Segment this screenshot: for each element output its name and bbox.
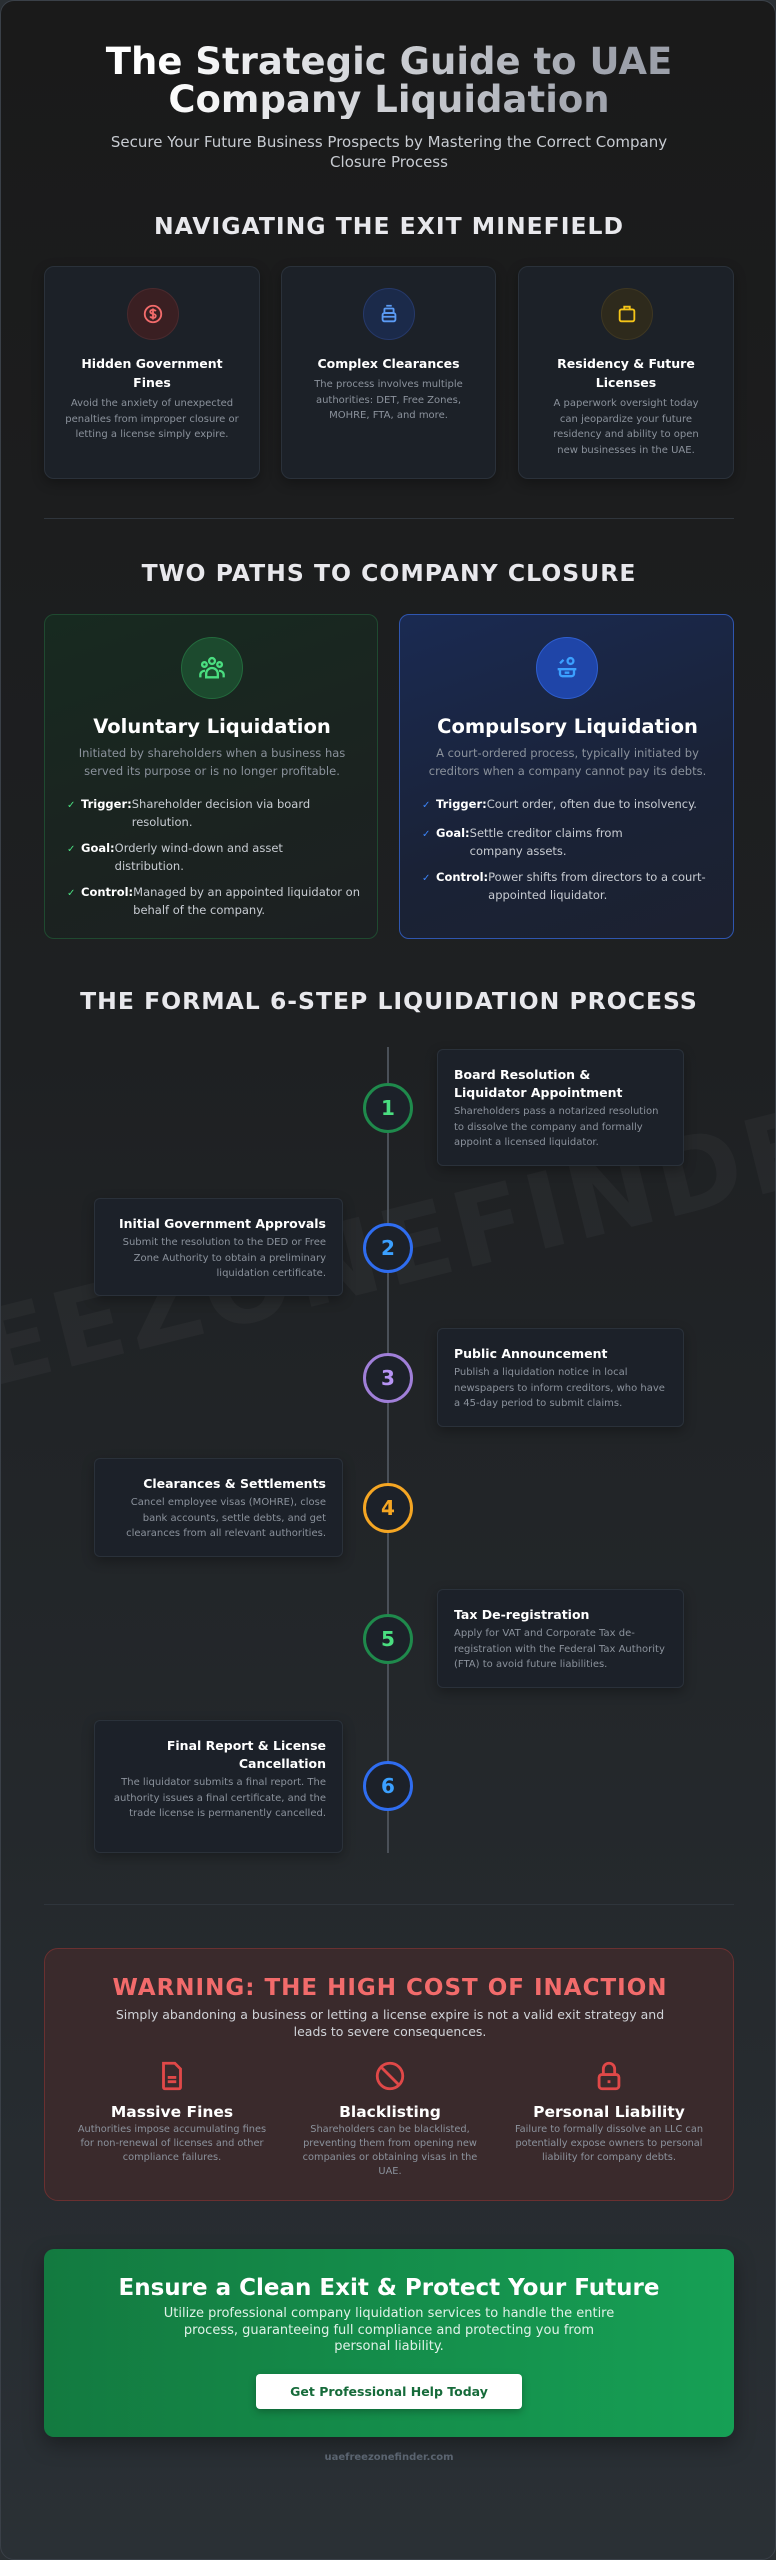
bullets: ✓ [67,888,75,899]
step 6: Final Report & License Cancellation [167,1738,326,1771]
cta title: Ensure a Clean Exit & Protect Your Future [119,2275,659,2301]
card title: Complex Clearances [317,356,460,371]
bullets: Court order, often due to insolvency. [487,797,697,811]
step 5 number: 5 [381,1627,395,1651]
icon: ban [376,2062,404,2090]
bullets: Power shifts from directors to a court-appointed liquidator. [488,870,706,902]
step 2 number [363,1223,413,1273]
panel desc: Initiated by shareholders when a business has served its purpose or is no longer profitable. [79,746,345,778]
step 6 number [363,1761,413,1811]
title: The Strategic Guide to UAE [106,40,672,83]
card title [81,356,223,390]
item: massive fines: Authorities impose accumulating fines for non-renewal of licenses and other compliance failures. [78,2124,266,2163]
bullets: ✓ [422,829,430,840]
step 1 [437,1049,684,1166]
step 2: Submit the resolution to the DED or Free Zone Authority to obtain a preliminary liquidation certificate. [123,1237,326,1279]
step 5: Apply for VAT and Corporate Tax de-registration with the Federal Tax Authority (FTA) to avoid future liabilities. [454,1628,665,1670]
cta text: Utilize professional company liquidation services to handle the entire process, guaranteeing full compliance and protecting you from personal liability. [164,2306,614,2354]
card title: Residency & Future [557,356,695,371]
icon: scales [536,637,598,699]
step 1 number: 1 [381,1096,395,1120]
item: personal liability: Personal Liability [533,2103,685,2121]
title: Company Liquidation [168,78,610,121]
title [1,43,776,119]
panel desc: A court-ordered process, typically initiated by creditors when a company cannot pay its debts. [429,746,706,778]
item: blacklisting: Blacklisting [339,2103,441,2121]
step 5: Tax De-registration [454,1607,589,1622]
step 6: The liquidator submits a final report. The authority issues a final certificate, and the trade license is permanently cancelled. [114,1777,326,1819]
step 1 number [363,1083,413,1133]
card title: Fines [133,375,171,390]
card title: Licenses [596,375,656,390]
step 1: Shareholders pass a notarized resolution to dissolve the company and formally appoint a licensed liquidator. [454,1106,658,1148]
bullets: ✓ [67,844,75,855]
card text: Avoid the anxiety of unexpected penalties from improper closure or letting a license simply expire. [65,398,239,440]
subtitle: Secure Your Future Business Prospects by Mastering the Correct Company Closure Process [111,133,667,171]
panel: cta [44,2249,734,2437]
bullets: Orderly wind-down and asset distribution. [115,841,283,873]
item: blacklisting [303,2062,477,2177]
item: personal liability: Failure to formally dissolve an LLC can potentially expose owners to personal liability for company debts. [515,2124,703,2163]
item: blacklisting: Shareholders can be blacklisted, preventing them from opening new companies or obtaining visas in the UAE. [303,2124,477,2177]
warning subtitle: Simply abandoning a business or letting a license expire is not a valid exit strategy and leads to severe consequences. [116,2007,664,2039]
item: personal liability [515,2062,703,2163]
step 4 number: 4 [381,1496,395,1520]
heading: two paths: TWO PATHS TO COMPANY CLOSURE [142,559,636,587]
panel: voluntary [44,614,378,939]
panel: warning [44,1948,734,2201]
step 4 number [363,1483,413,1533]
icon: lock [598,2062,620,2090]
card: complex clearances [281,266,496,479]
bullets: Trigger: [81,797,132,811]
cta button: Get Professional Help Today [290,2384,488,2399]
step 2 [94,1198,343,1296]
card text: A paperwork oversight today can jeopardize your future residency and ability to open new businesses in the UAE. [553,398,699,456]
item: massive fines [78,2062,266,2163]
bullets: ✓ [422,800,430,811]
bullets [422,797,706,902]
panel title: Voluntary Liquidation [93,715,331,738]
timeline [387,1047,389,1853]
step 3 number [363,1353,413,1403]
bullets: Managed by an appointed liquidator on behalf of the company. [133,885,360,917]
step 3 number: 3 [381,1366,395,1390]
step 3: Public Announcement [454,1346,607,1361]
item: massive fines: Massive Fines [111,2103,233,2121]
card title [557,356,695,390]
cta button [256,2374,522,2409]
bullets: Shareholder decision via board resolution. [132,797,310,829]
step 4: Cancel employee visas (MOHRE), close bank accounts, settle debts, and get clearances from all relevant authorities. [126,1497,326,1539]
step 4: Clearances & Settlements [143,1476,326,1491]
bullets: Settle creditor claims from company assets. [470,826,623,858]
bullets: Control: [81,885,133,899]
step 4 [94,1458,343,1557]
bullets: Control: [436,870,488,884]
icon: document [162,2062,182,2090]
step 5 [437,1589,684,1688]
bullets: ✓ [422,873,430,884]
step 2: Initial Government Approvals [119,1216,326,1231]
step 3 [437,1328,684,1427]
step 5 number [363,1614,413,1664]
footer: uaefreezonefinder.com [324,2452,454,2463]
panel: compulsory [399,614,734,939]
bullets: Trigger: [436,797,487,811]
bullets [67,797,360,917]
icon: briefcase [601,288,653,340]
card text: The process involves multiple authorities: DET, Free Zones, MOHRE, FTA, and more. [314,379,463,421]
panel title: Compulsory Liquidation [437,715,698,738]
step 6 [94,1720,343,1853]
bullets: Goal: [81,841,115,855]
step 2 number: 2 [381,1236,395,1260]
icon: dollar [127,288,179,340]
heading: navigating: NAVIGATING THE EXIT MINEFIELD [154,212,624,240]
bullets: Goal: [436,826,470,840]
card: hidden fines [44,266,260,479]
step 3: Publish a liquidation notice in local newspapers to inform creditors, who have a 45-day period to submit claims. [454,1367,665,1409]
icon: group [181,637,243,699]
card: residency [518,266,734,479]
card title: Hidden Government [81,356,223,371]
step 6 number: 6 [381,1774,395,1798]
step 1: Board Resolution & Liquidator Appointment [454,1067,623,1100]
icon: stack [363,288,415,340]
heading: 6-step: THE FORMAL 6-STEP LIQUIDATION PROCESS [80,987,698,1015]
warning title: WARNING: THE HIGH COST OF INACTION [112,1975,668,2001]
bullets: ✓ [67,800,75,811]
